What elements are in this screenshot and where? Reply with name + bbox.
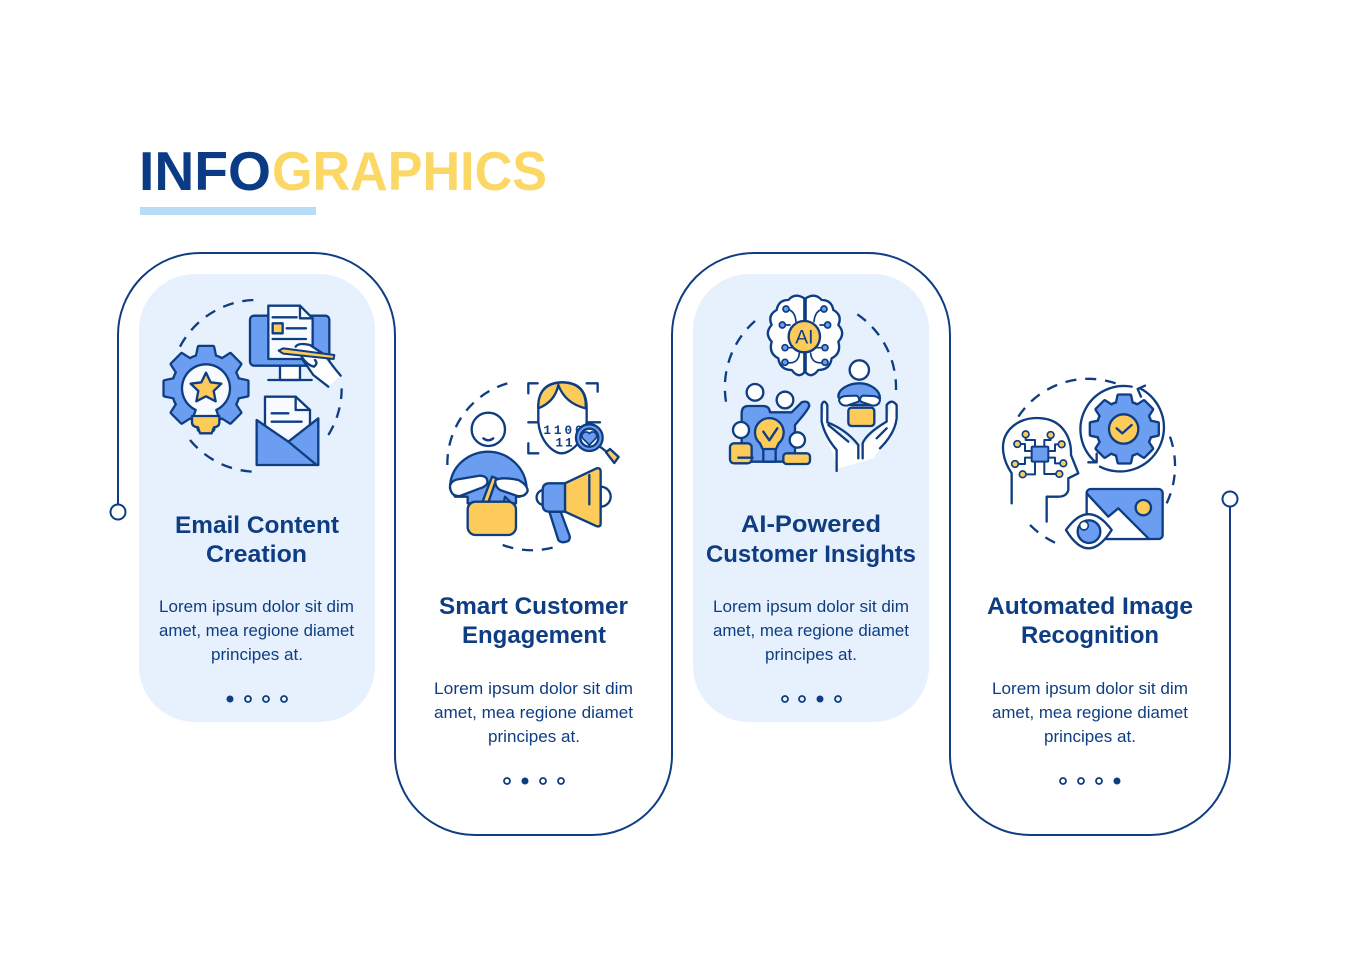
body text: amet, mea regione diamet [159,621,354,640]
heading: Creation [206,541,307,568]
outline end node [1222,492,1238,506]
heading [987,593,1193,649]
panel: Automated Image Recognition [987,379,1193,784]
body text: amet, mea regione diamet [713,621,909,640]
panel: Email Content Creation [159,300,354,702]
heading: Customer Insights [706,541,916,568]
body text: Lorem ipsum dolor sit dim [434,679,633,698]
body text: Lorem ipsum dolor sit dim [159,597,354,616]
body text [159,597,354,664]
heading [175,512,339,568]
icon: automated image recognition [1003,379,1175,548]
icon: smart customer engagement [447,382,619,550]
body text: Lorem ipsum dolor sit dim [992,679,1188,698]
outline start node [110,504,126,520]
title: INFO [139,140,271,202]
heading: Smart Customer [439,593,628,620]
icon: smart customer engagement: 11 [555,435,573,450]
body text [992,679,1188,746]
title: GRAPHICS [272,140,547,202]
heading: Recognition [1021,622,1159,649]
heading: Email Content [175,512,339,539]
pagination dots [226,696,287,702]
body text: principes at. [488,727,580,746]
body text: Lorem ipsum dolor sit dim [713,597,909,616]
body text: amet, mea regione diamet [434,703,633,722]
heading: Engagement [462,622,606,649]
panel: Smart Customer Engagement [434,382,633,784]
heading: AI-Powered [741,511,881,538]
icon: email content creation [165,300,342,472]
pagination dots [504,778,564,784]
body text [434,679,633,746]
panel: AI-Powered Customer Insights [706,296,916,702]
heading: Automated Image [987,593,1193,620]
pagination dots [782,696,841,702]
connecting outline [118,253,1230,835]
icon: ai-powered customer insights [725,296,898,471]
heading [439,593,628,649]
body text: principes at. [211,645,303,664]
heading [706,511,916,568]
body text: principes at. [1044,727,1136,746]
body text [713,597,909,664]
icon: ai-powered customer insights: AI [795,328,813,349]
icon: smart customer engagement: 1100 [543,423,583,438]
pagination dots [1060,778,1120,784]
panel: light background 3 [693,274,929,722]
body text: principes at. [765,645,857,664]
body text: amet, mea regione diamet [992,703,1188,722]
panel: light background 1 [139,274,375,722]
title [139,140,547,202]
title underline [140,207,316,215]
